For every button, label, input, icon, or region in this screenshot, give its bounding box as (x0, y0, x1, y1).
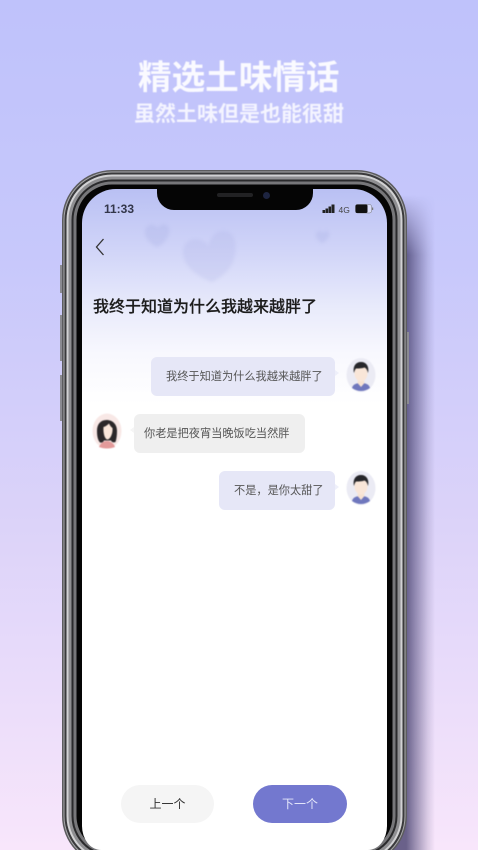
side button left lower (60, 375, 62, 421)
subtitle: 虽然土味但是也能很甜 (134, 103, 344, 126)
background hearts (146, 226, 328, 280)
phone (62, 170, 407, 850)
next button (253, 785, 347, 823)
chat bubble 1 (151, 357, 335, 396)
side button left upper (60, 265, 62, 293)
screen (82, 189, 387, 850)
camera (263, 192, 270, 199)
phone shadow (394, 200, 433, 850)
bubble 2 tail (130, 427, 134, 433)
status time: 11:33 (104, 202, 134, 216)
right heart (316, 231, 329, 243)
phone frame rings (62, 170, 407, 850)
chat bubble 3: 不是，是你太甜了 (234, 485, 324, 497)
avatar: man 2 (346, 471, 376, 505)
title: 精选土味情话 (138, 60, 339, 97)
back arrow (96, 238, 104, 256)
chat bubble 1: 我终于知道为什么我越来越胖了 (166, 371, 323, 383)
side button left middle (60, 315, 62, 361)
avatar: woman (92, 414, 122, 449)
chat bubble 2: 你老是把夜宵当晚饭吃当然胖 (144, 428, 289, 440)
status icons (322, 204, 374, 215)
next button: 下一个 (282, 797, 318, 811)
chat bubble 2 (134, 414, 305, 453)
small heart (145, 224, 169, 247)
previous button (121, 785, 214, 823)
large heart (183, 231, 236, 282)
avatar: man 1 (346, 358, 376, 392)
heading: 我终于知道为什么我越来越胖了 (93, 299, 317, 316)
speaker (217, 193, 253, 197)
side button right (407, 332, 409, 404)
bubble 1 tail (335, 370, 339, 376)
chat bubble 3 (219, 471, 335, 510)
status icons: 4G (338, 205, 350, 215)
bubble 3 tail (335, 484, 339, 490)
notch (157, 188, 313, 210)
previous button: 上一个 (149, 797, 186, 811)
